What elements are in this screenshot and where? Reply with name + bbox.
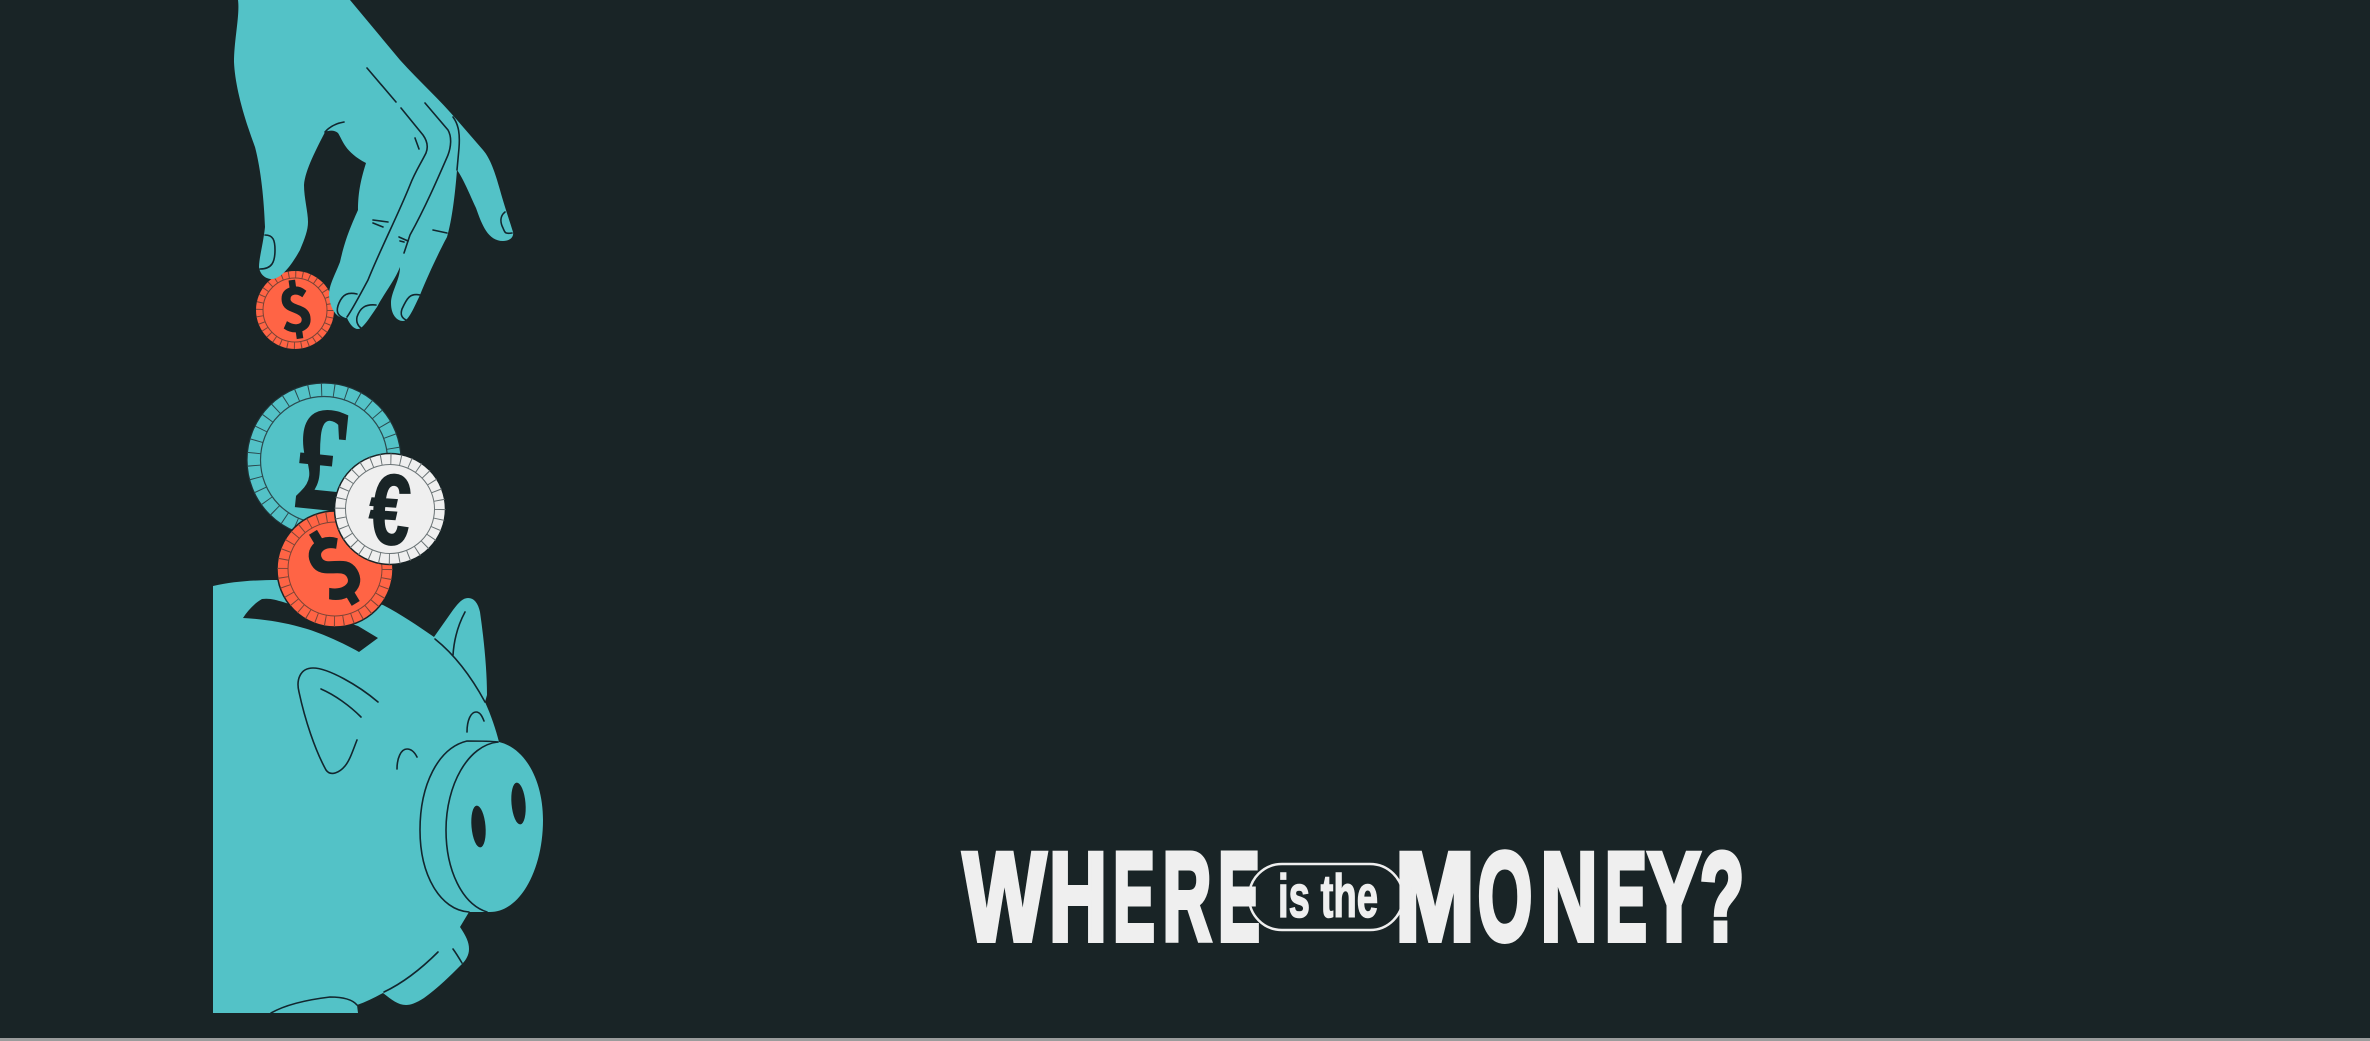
- coin: dollar small: $: [273, 259, 318, 350]
- heading WHERE: [963, 826, 1260, 967]
- pig ear and face lines: [271, 612, 498, 1013]
- coin: dollar small: [256, 259, 334, 350]
- coin: pound: £: [288, 376, 358, 542]
- coin: euro: €: [366, 452, 414, 567]
- heading WHERE: E: [1113, 827, 1155, 967]
- heading MONEY?: O: [1478, 828, 1532, 967]
- heading MONEY?: Y: [1648, 828, 1700, 968]
- icon: piggy bank: [213, 580, 543, 1013]
- heading WHERE: W: [963, 826, 1046, 967]
- heading MONEY?: N: [1541, 828, 1597, 968]
- coin slot: [243, 599, 378, 652]
- pill badge: [1249, 864, 1403, 930]
- icon: hand: [234, 0, 513, 329]
- title: WHERE is the MONEY?: [963, 826, 1744, 968]
- hand detail lines: [260, 68, 512, 328]
- coin: dollar large: $: [280, 498, 383, 627]
- heading WHERE: R: [1163, 828, 1211, 967]
- nostrils: [470, 782, 527, 848]
- heading WHERE: E: [1218, 827, 1260, 967]
- coin: pound: [247, 376, 401, 542]
- coin: euro: [334, 452, 446, 567]
- badge text: is the: [1278, 863, 1378, 930]
- heading MONEY?: [1395, 827, 1744, 968]
- heading MONEY?: E: [1605, 827, 1647, 967]
- heading WHERE: H: [1049, 828, 1107, 967]
- heading MONEY?: M: [1395, 827, 1475, 967]
- heading MONEY?: ?: [1700, 827, 1744, 967]
